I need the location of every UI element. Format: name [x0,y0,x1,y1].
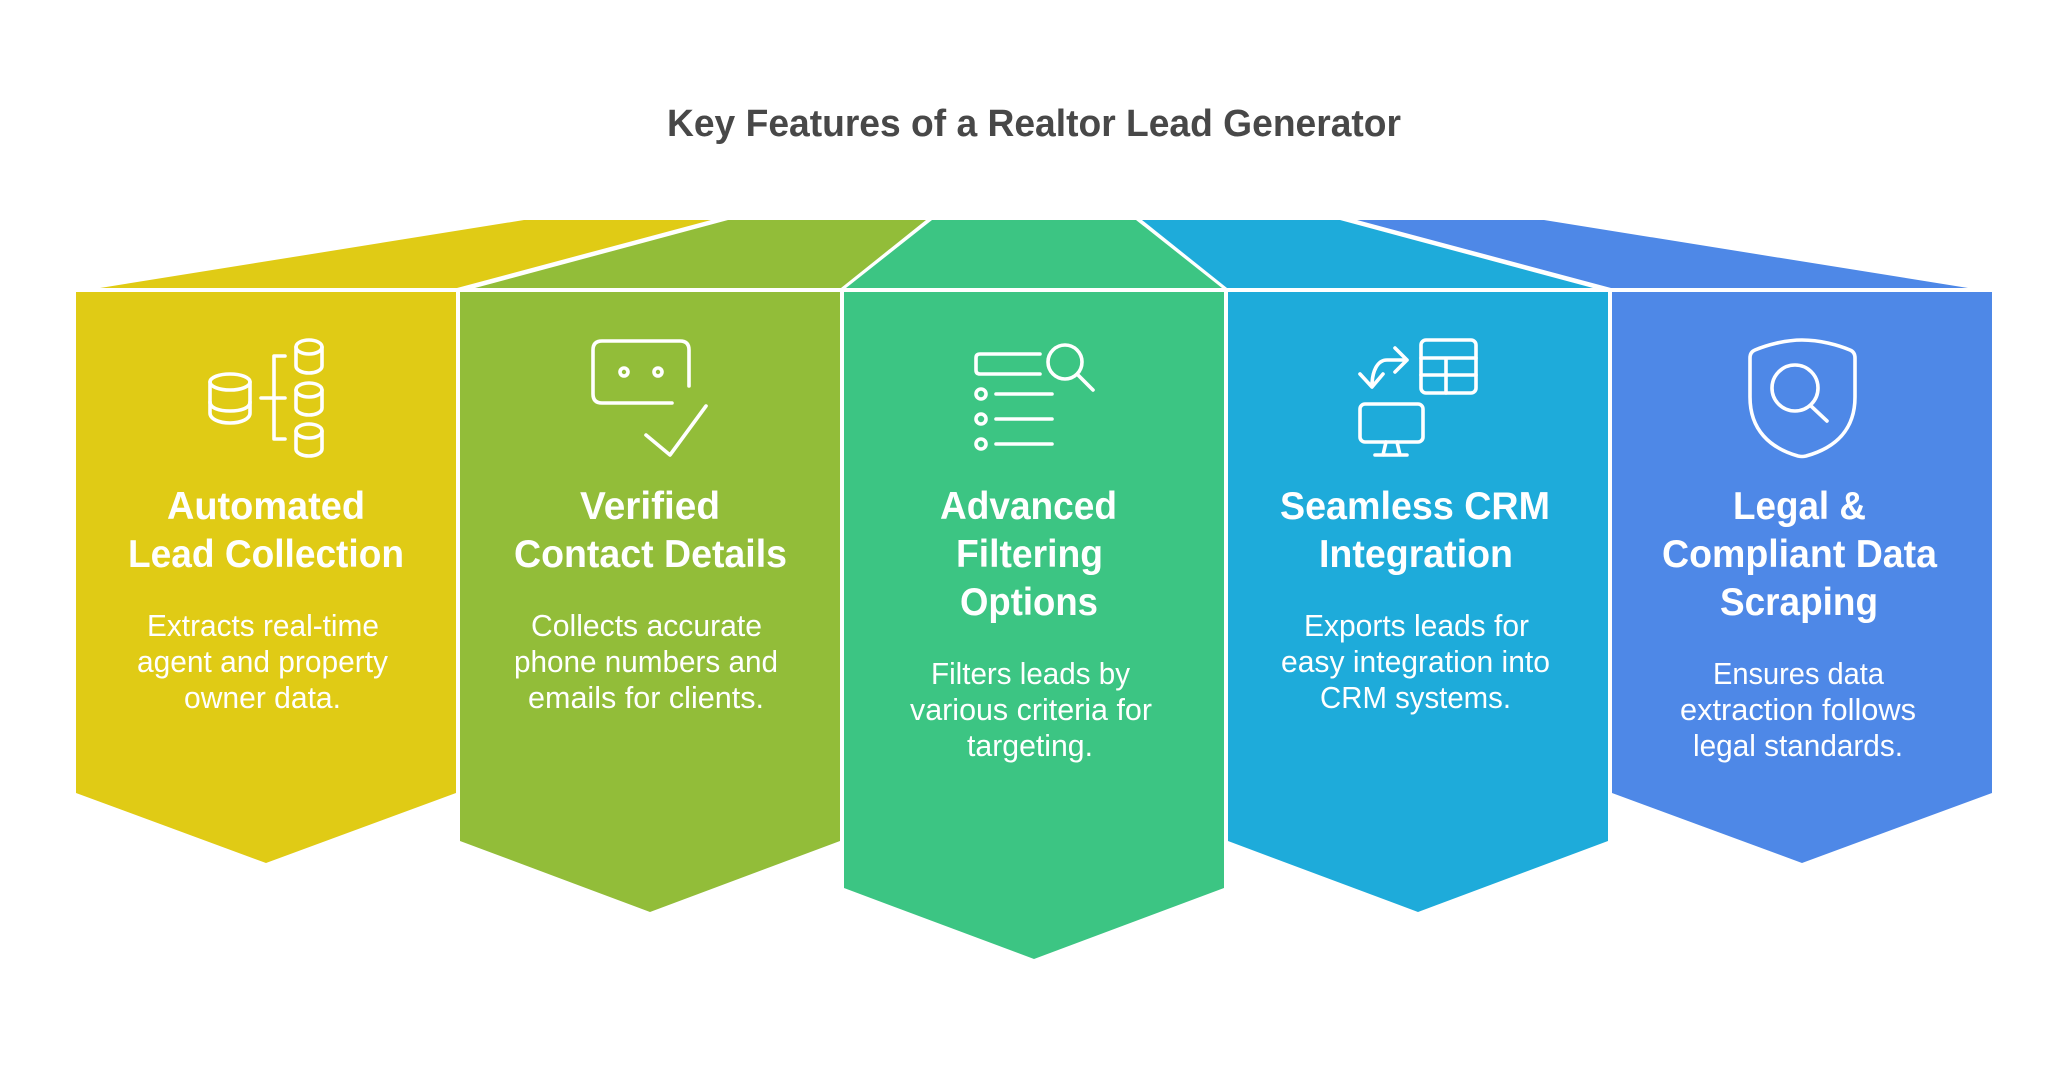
description: easy integration into [1281,645,1550,679]
description [514,609,778,715]
roof: green [475,220,926,288]
description: extraction follows [1680,693,1916,727]
heading [1280,485,1550,576]
description: CRM systems. [1320,681,1511,715]
heading: Seamless CRM [1280,485,1550,528]
heading: Contact Details [514,533,787,576]
description: targeting. [967,729,1093,763]
icon: contact check [593,341,706,455]
panel: advanced filtering options [844,220,1224,959]
description: Exports leads for [1304,609,1529,643]
heading [1662,485,1937,624]
body: teal [844,292,1224,959]
heading: Options [960,581,1098,624]
icon: filter list [976,345,1093,449]
description: phone numbers and [514,645,778,679]
body: blue [1228,292,1608,912]
heading: Filtering [956,533,1103,576]
heading: Automated [167,485,365,528]
roof: blue [1142,220,1593,288]
description: Collects accurate [531,609,762,643]
description [910,657,1152,763]
heading: Integration [1319,533,1513,576]
description: Ensures data [1713,657,1884,691]
description [1281,609,1550,715]
panel: verified contact details [460,220,926,912]
body: green [460,292,840,912]
title: Key Features of a Realtor Lead Generator [667,103,1401,145]
body: yellow [76,292,456,863]
panel: automated lead collection [76,220,711,863]
panel: legal and compliant data scraping [1357,220,1992,863]
description: agent and property [137,645,389,679]
description: various criteria for [910,693,1152,727]
heading: Legal & [1733,485,1866,528]
description: Extracts real-time [147,609,379,643]
heading: Advanced [940,485,1117,528]
description: emails for clients. [528,681,764,715]
panel: seamless crm integration [1142,220,1608,912]
heading [128,485,404,576]
roof: yellow [100,220,711,288]
body: indigo [1612,292,1992,863]
icon: shield search [1750,340,1855,456]
heading: Scraping [1720,581,1878,624]
icon: crm sync [1360,340,1476,455]
heading: Compliant Data [1662,533,1937,576]
description [1680,657,1916,763]
roof: teal [846,220,1222,288]
heading [940,485,1117,624]
description [137,609,389,715]
heading [514,485,787,576]
heading: Lead Collection [128,533,404,576]
description: legal standards. [1693,729,1903,763]
roof: indigo [1357,220,1968,288]
description: owner data. [184,681,341,715]
icon: databases [210,340,322,456]
description: Filters leads by [931,657,1131,691]
heading: Verified [580,485,720,528]
